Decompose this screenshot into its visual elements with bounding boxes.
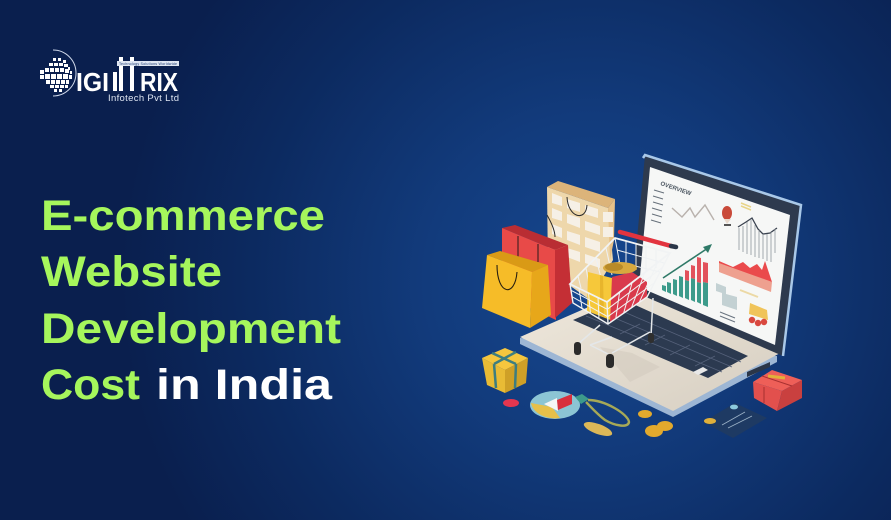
icon: yellow shopping bag: [482, 251, 551, 328]
shopping cart: [570, 232, 676, 368]
screen tiles: [716, 283, 737, 310]
screen line chart: [672, 205, 714, 220]
icon: coins: [638, 410, 673, 437]
trackpad: [600, 347, 660, 382]
title: in India: [156, 361, 333, 409]
icon: red gift box: [753, 370, 802, 411]
icon: beige shopping bag: [547, 181, 615, 300]
screen arrow: [663, 244, 712, 278]
cart legs and wheels: [574, 298, 654, 368]
cart basket wires: [570, 238, 670, 324]
screen yellow stack: [749, 303, 768, 326]
screen spike chart: [738, 218, 777, 262]
icon: red blob: [503, 399, 519, 407]
screen title: OVERVIEW: [659, 181, 692, 197]
icon: pill tag: [582, 419, 614, 439]
logo: RIX: [140, 67, 179, 97]
laptop base: [520, 288, 782, 417]
icon: gauge tag: [530, 391, 589, 419]
illustration: laptop with shopping: [482, 155, 802, 439]
icon: globe: [40, 50, 76, 96]
cart contents: [587, 262, 647, 322]
title: E-commerce: [41, 192, 325, 240]
title: Development: [41, 305, 341, 353]
keyboard: [573, 299, 748, 378]
icon: yellow gift box: [482, 348, 528, 393]
icon: payment card: [703, 403, 767, 438]
title: Cost: [41, 361, 140, 409]
logo tagline: Infotech Pvt Ltd: [108, 93, 179, 104]
logo: Technology Solutions Worldwide: [119, 62, 177, 66]
screen list: [651, 190, 664, 223]
screen bar chart: [662, 257, 708, 307]
ports: [747, 362, 770, 377]
cart handle: [620, 232, 676, 247]
laptop screen: [632, 155, 801, 356]
logo: [40, 50, 179, 104]
screen area chart: [719, 261, 772, 292]
title: [41, 192, 341, 409]
title: Website: [41, 248, 222, 296]
cart back wires: [578, 238, 664, 290]
logo wordmark: IGI: [76, 67, 109, 97]
icon: chain loop: [586, 400, 629, 426]
screen balloon icon: [722, 206, 732, 226]
icon: red shopping bag: [502, 225, 572, 320]
